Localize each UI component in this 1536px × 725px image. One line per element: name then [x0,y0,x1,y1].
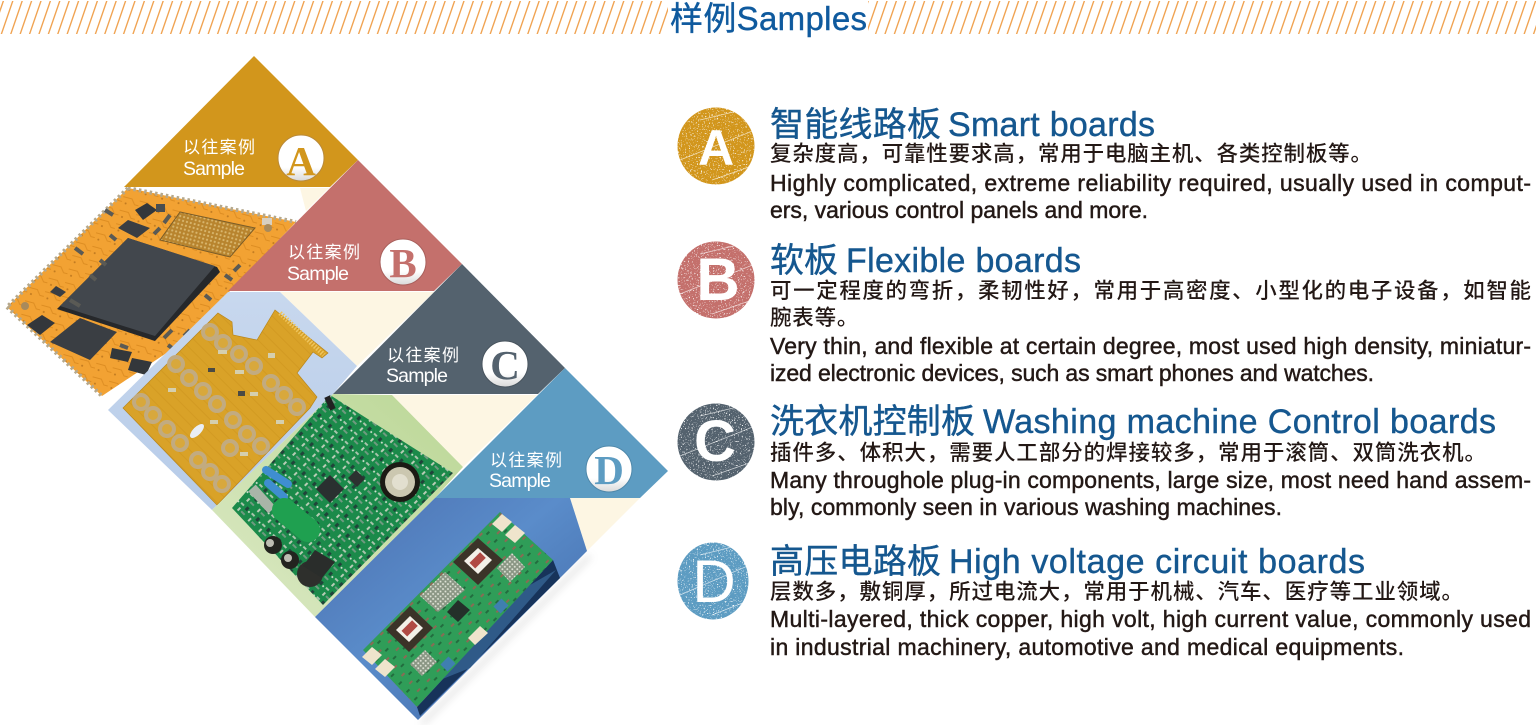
sample diamond collage [7,56,668,724]
photo: green washing machine board [212,394,463,617]
text C [770,436,1531,520]
banner C: Sample [386,365,448,387]
text C: Many throughole plug-in components, large size, most need hand assem- [770,467,1531,493]
header band [0,0,1536,37]
text C: bly, commonly seen in various washing machines. [770,494,1282,520]
badge C: C [490,342,520,388]
banner A [124,56,358,187]
soft shadow [422,556,590,724]
icon: circle A: A [698,120,734,176]
heading B: Flexible boards [846,242,1081,280]
text A: Highly complicated, extreme reliability required, usually used in comput- [770,170,1531,196]
heading D: 高压电路板 [770,543,941,581]
hatch left [0,1,668,34]
text A [770,137,1531,223]
text A: ers, various control panels and more. [770,197,1148,223]
heading B: 软板 [770,242,838,280]
badge D: D [594,447,624,493]
heading D: High voltage circuit boards [949,543,1365,581]
text D: 层数多，敷铜厚，所过电流大，常用于机械、汽车、医疗等工业领域。 [770,575,1463,606]
badge B [380,239,426,286]
icon: circle A [677,107,755,185]
label C: 以往案例 [387,341,459,366]
icon: circle B: B [696,246,740,313]
label B: 以往案例 [288,238,360,263]
banner A: Sample [183,158,245,180]
text C: 插件多、体积大，需要人工部分的焊接较多，常用于滚筒、双筒洗衣机。 [770,436,1486,467]
text B: Very thin, and flexible at certain degree, most used high density, miniatur- [770,333,1531,359]
badge D [586,446,632,493]
icon: circle D [677,542,750,620]
item C [677,403,1531,520]
title: 样例Samples [670,0,867,37]
panel: cream background [280,188,640,551]
photo: orange smart board [7,188,296,396]
text D: Multi-layered, thick copper, high volt, high current value, commonly used [770,606,1531,632]
heading C: 洗衣机控制板 [770,403,975,441]
icon: circle C: C [694,409,736,474]
badge C [482,341,528,388]
text B: 腕表等。 [770,301,859,332]
text B: 可一定程度的弯折，柔韧性好，常用于高密度、小型化的电子设备，如智能 [770,274,1531,305]
badge A: A [286,138,316,184]
text A: 复杂度高，可靠性要求高，常用于电脑主机、各类控制板等。 [770,137,1372,168]
icon: circle D: D [692,548,736,615]
heading C: Washing machine Control boards [983,403,1496,441]
heading A: 智能线路板 [770,106,941,144]
badge B: B [389,240,417,286]
label D: 以往案例 [490,446,562,471]
photo: flexible board [108,292,357,510]
item A [677,106,1531,223]
heading D [770,543,1365,581]
banner D: Sample [489,470,551,492]
photo: blue high voltage board [315,498,587,720]
item D [677,542,1531,660]
label A: 以往案例 [183,133,255,158]
banner D [435,368,668,498]
icon: circle B [677,241,755,319]
heading A [770,106,1155,144]
text B: ized electronic devices, such as smart phones and watches. [770,360,1374,386]
banner C [333,264,565,394]
banner B: Sample [287,263,349,285]
heading A: Smart boards [948,106,1155,144]
text D: in industrial machinery, automotive and medical equipments. [770,634,1404,660]
banner B [228,160,462,291]
badge A [278,135,324,184]
item B [677,241,1531,386]
text D [770,575,1531,660]
hatch right [868,1,1536,34]
text B [770,274,1531,386]
icon: circle C [677,403,755,481]
